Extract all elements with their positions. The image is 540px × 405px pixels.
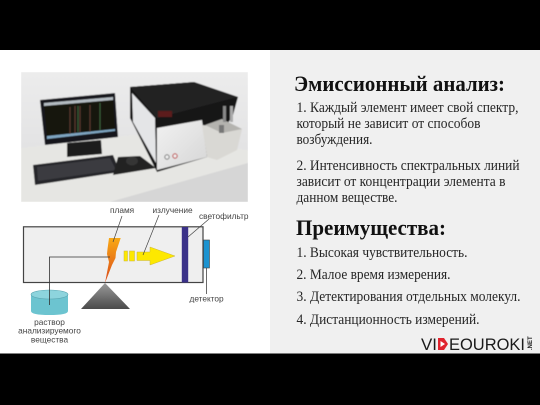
slide background	[0, 50, 540, 354]
list item 3: 3. Детектирования отдельных молекул.	[296, 289, 520, 305]
spectrometer body	[130, 82, 242, 172]
text block: point 1: 1. Каждый элемент имеет свой спектр,	[296, 100, 518, 116]
diagram: emission analysis scheme	[18, 205, 249, 344]
text block: point 2: зависит от концентрации элемента в	[296, 174, 506, 190]
mouse pad and mouse	[113, 156, 156, 175]
label: flame: пламя	[110, 205, 134, 215]
label: filter: светофильтр	[199, 211, 249, 221]
table surface	[21, 135, 248, 202]
cone burner	[81, 283, 130, 309]
monitor	[40, 93, 118, 157]
logo: VIDEOUROKI: EOUROKI	[449, 336, 525, 354]
flame	[105, 238, 121, 283]
label: sample solution: анализируемого	[18, 326, 81, 336]
list item 1: 1. Высокая чувствительность.	[296, 245, 468, 261]
light filter	[182, 227, 188, 282]
text block: point 2: 2. Интенсивность спектральных линий	[296, 158, 520, 174]
radiation arrow	[124, 247, 175, 265]
sample chamber	[24, 227, 203, 282]
photo: emission spectrometer with computer	[21, 72, 248, 202]
logo: VIDEOUROKI: .NET	[528, 336, 534, 350]
text block: point 1: который не зависит от способов	[296, 116, 481, 132]
detector	[204, 240, 210, 294]
sample feed line	[50, 257, 110, 305]
label: radiation: излучение	[152, 205, 193, 215]
sample vessel	[31, 290, 68, 315]
text block: point 1: возбуждения.	[296, 132, 372, 148]
text block: point 2: данном веществе.	[296, 190, 398, 206]
list item 2: 2. Малое время измерения.	[296, 267, 450, 283]
heading: advantages: Преимущества:	[296, 215, 446, 240]
heading: emission analysis: Эмиссионный анализ:	[294, 71, 505, 96]
leader lines	[113, 215, 209, 255]
keyboard	[33, 155, 120, 185]
list item 4: 4. Дистанционность измерений.	[296, 312, 480, 328]
label: sample solution: раствор	[34, 317, 65, 327]
logo: VIDEOUROKI	[421, 336, 534, 354]
label: detector: детектор	[190, 294, 224, 304]
label: sample solution: вещества	[31, 334, 68, 344]
logo: VIDEOUROKI: VI	[421, 336, 437, 354]
